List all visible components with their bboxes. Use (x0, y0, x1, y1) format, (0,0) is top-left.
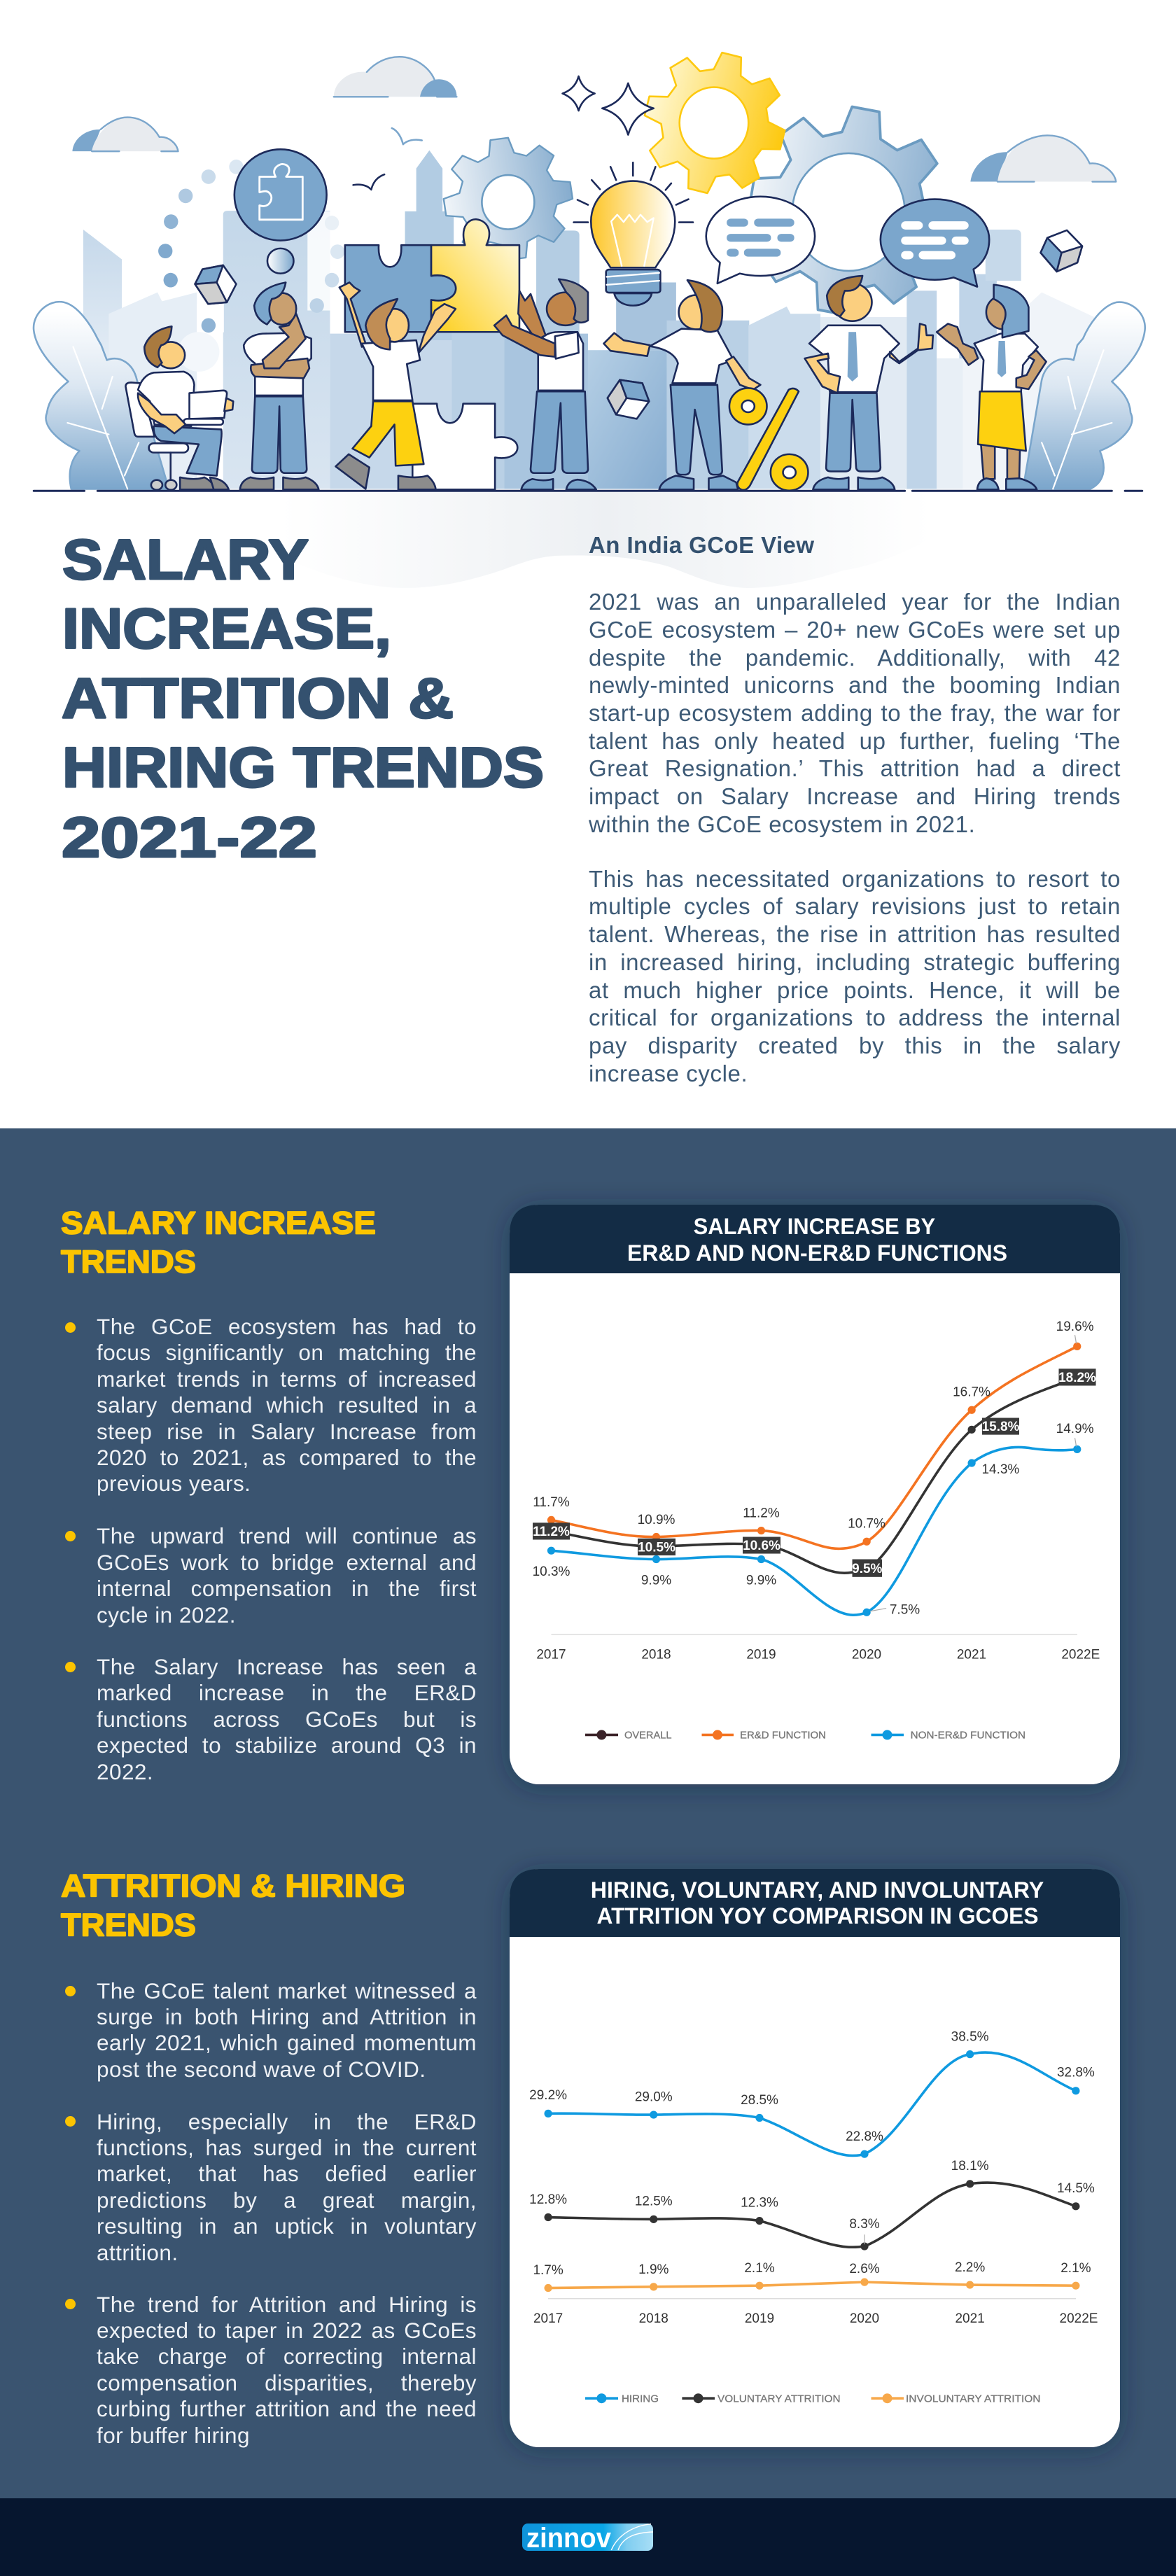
intro paragraph 1: newly-minted unicorns and the booming Indian (589, 672, 1121, 698)
attrition bullet 3: for buffer hiring (97, 2423, 250, 2448)
person: man holding puzzle (494, 279, 596, 489)
salary bullet 3: The Salary Increase has seen a (97, 1654, 477, 1679)
salary bullet 2: GCoEs work to bridge external and (97, 1550, 477, 1575)
intro paragraph 1: start-up ecosystem adding to the fray, the war for (589, 700, 1121, 726)
value labels: ER&D: 11.7% (533, 1495, 570, 1510)
attrition bullet 3: The trend for Attrition and Hiring is (97, 2292, 477, 2317)
value labels: overall: 15.8% (982, 1420, 1020, 1434)
x axis years: 2020 (850, 2311, 879, 2326)
light bulb (574, 162, 693, 306)
speech bubble: white (706, 197, 815, 284)
value labels: overall: 9.5% (852, 1562, 883, 1576)
heading: salary increase trends: SALARY INCREASE (61, 1205, 376, 1240)
salary bullet 3: 2022. (97, 1759, 153, 1784)
person: woman raising puzzle (335, 282, 456, 489)
value labels: non-ER&D (533, 1422, 1094, 1617)
chart title (627, 1214, 1007, 1266)
plant: left (34, 302, 169, 489)
salary bullet 1: market trends in terms of increased (97, 1366, 477, 1392)
attrition bullet 1: surge in both Hiring and Attrition in (97, 2004, 477, 2029)
value labels: voluntary attrition (529, 2159, 1095, 2232)
attrition bullet 2: resulting in an uptick in voluntary (97, 2213, 477, 2239)
cube: lower (608, 380, 649, 419)
value labels: hiring: 22.8% (846, 2129, 883, 2144)
birds (354, 128, 422, 190)
x axis years: 2017 (536, 1648, 566, 1662)
attrition bullet 1: The GCoE talent market witnessed a (97, 1978, 477, 2003)
illustration: team solving a puzzle (34, 38, 1145, 491)
city skyline (83, 150, 1094, 489)
gear: small blue (436, 130, 580, 267)
salary bullet 1: salary demand which resulted in a (97, 1392, 477, 1418)
salary bullet 1: previous years. (97, 1471, 251, 1496)
value labels: ER&D: 11.2% (743, 1506, 780, 1520)
attrition bullet 3: expected to taper in 2022 as GCoEs (97, 2318, 477, 2343)
line series: overall, ER&D, non-ER&D (547, 1336, 1081, 1616)
bullet marker (64, 1531, 76, 1541)
attrition bullet 3: curbing further attrition and the need (97, 2396, 477, 2421)
attrition bullet 2: functions, has surged in the current (97, 2135, 477, 2160)
gear: yellow (630, 38, 799, 208)
attrition bullet 3: take charge of correcting internal (97, 2344, 477, 2369)
salary bullet 1: 2020 to 2021, as compared to the (97, 1445, 477, 1470)
value labels: overall: 11.2% (533, 1525, 570, 1539)
value labels: involuntary attrition: 2.1% (1060, 2261, 1091, 2276)
value labels: hiring: 38.5% (951, 2030, 989, 2044)
attrition bullet 3 (97, 2292, 477, 2448)
salary bullet 1: focus significantly on matching the (97, 1340, 477, 1365)
cube: right (1041, 230, 1082, 272)
panel: hiring and attrition chart (510, 1869, 1120, 2447)
title: SALARY (62, 528, 309, 592)
intro paragraph 1: within the GCoE ecosystem in 2021. (589, 811, 975, 837)
value labels: hiring: 29.2% (529, 2088, 567, 2103)
legend: INVOLUNTARY ATTRITION (906, 2393, 1040, 2404)
speech bubble: blue (881, 200, 989, 287)
value labels: hiring (529, 2030, 1095, 2144)
cube: left (195, 265, 236, 304)
salary bullet 1 (97, 1314, 477, 1496)
line series: hiring, voluntary, involuntary (545, 2050, 1079, 2292)
legend: VOLUNTARY ATTRITION (718, 2393, 841, 2404)
person: man with thumbs up (805, 276, 933, 489)
attrition bullet 2 (97, 2108, 477, 2265)
intro paragraph 2: at much higher price points. Hence, it will be (589, 977, 1121, 1002)
value labels: overall: 18.2% (1058, 1371, 1096, 1385)
heading: salary increase trends (61, 1205, 376, 1280)
value labels: hiring: 32.8% (1057, 2066, 1095, 2080)
x axis years (533, 2311, 1098, 2326)
chart title: ER&D AND NON-ER&D FUNCTIONS (627, 1240, 1007, 1266)
heading: attrition and hiring trends: ATTRITION & HIRING (61, 1868, 405, 1904)
gear: large blue (734, 92, 962, 330)
footer bar (0, 2498, 1176, 2576)
value labels: ER&D: 19.6% (1056, 1320, 1094, 1334)
title (62, 528, 544, 869)
attrition bullet 1: early 2021, which gained momentum (97, 2030, 477, 2055)
value labels: voluntary attrition: 18.1% (951, 2159, 989, 2174)
value labels: voluntary attrition: 12.5% (635, 2194, 673, 2209)
intro paragraph 1: GCoE ecosystem – 20+ new GCoEs were set up (589, 617, 1121, 643)
attrition bullet 3: compensation disparities, thereby (97, 2370, 477, 2395)
logo: zinnov (522, 2523, 653, 2554)
salary bullet 2 (97, 1523, 477, 1628)
intro paragraph 1: Great Resignation.’ This attrition had a direct (589, 755, 1121, 781)
intro paragraph 2: in increased hiring, including strategic buffering (589, 949, 1121, 975)
intro paragraph 1 (589, 589, 1121, 837)
person: woman presenting (603, 280, 760, 489)
card background (510, 1205, 1120, 1784)
value labels: non-ER&D: 9.9% (641, 1573, 671, 1588)
intro paragraph 2: pay disparity created by this in the salary (589, 1032, 1121, 1058)
value labels: overall: 10.5% (638, 1540, 676, 1555)
attrition bullet 2: attrition. (97, 2240, 178, 2265)
puzzle pieces held up (345, 219, 519, 332)
card header (510, 1205, 1120, 1273)
value labels: involuntary attrition: 1.7% (533, 2263, 564, 2278)
title: HIRING TRENDS (62, 736, 544, 799)
chart title: SALARY INCREASE BY (694, 1214, 935, 1239)
legend: HIRING (622, 2393, 659, 2404)
x axis years: 2020 (852, 1648, 881, 1662)
intro paragraph 2: increase cycle. (589, 1060, 748, 1086)
value labels: non-ER&D: 9.9% (746, 1573, 776, 1588)
percent symbol (729, 388, 808, 491)
x axis years: 2022E (1060, 2311, 1098, 2326)
axis line (548, 2298, 1076, 2300)
legend: OVERALL (624, 1729, 672, 1741)
intro paragraph 1: talent has only heated up further, fueling ‘The (589, 728, 1121, 754)
cloud: left (72, 118, 178, 151)
value labels: involuntary attrition: 2.1% (744, 2261, 775, 2276)
title: 2021-22 (62, 806, 317, 869)
salary bullet 2: The upward trend will continue as (97, 1523, 477, 1548)
salary bullet 3: marked increase in the ER&D (97, 1680, 477, 1705)
value labels: voluntary attrition: 12.3% (741, 2195, 778, 2210)
person: seated with laptop (125, 326, 233, 490)
value labels: voluntary attrition: 12.8% (529, 2192, 567, 2207)
person: woman in yellow skirt (937, 285, 1046, 489)
cloud: top centre (334, 57, 456, 97)
value labels: involuntary attrition: 2.6% (849, 2262, 880, 2276)
attrition bullet 1: post the second wave of COVID. (97, 2057, 426, 2082)
logo: zinnov: zinnov (526, 2523, 612, 2554)
intro paragraph 1: 2021 was an unparalleled year for the Indian (589, 589, 1121, 615)
bullet marker (64, 1985, 76, 1996)
value labels: involuntary attrition: 1.9% (638, 2262, 669, 2277)
value labels: voluntary attrition: 8.3% (849, 2217, 880, 2232)
x axis years: 2019 (745, 2311, 774, 2326)
legend: ER&D FUNCTION (740, 1729, 826, 1741)
heading: salary increase trends: TRENDS (61, 1244, 196, 1280)
chart title: HIRING, VOLUNTARY, AND INVOLUNTARY (591, 1877, 1044, 1903)
white puzzle piece (412, 404, 517, 489)
plant: right (1023, 302, 1145, 489)
salary bullet 3: functions across GCoEs but is (97, 1707, 477, 1732)
heading: attrition and hiring trends (61, 1868, 405, 1943)
salary bullet 1: steep rise in Salary Increase from (97, 1419, 477, 1444)
value labels: non-ER&D: 10.3% (533, 1564, 570, 1579)
title: ATTRITION & (62, 667, 454, 730)
attrition bullet 2: predictions by a great margin, (97, 2188, 477, 2213)
card header (510, 1869, 1120, 1937)
value labels: overall: 10.6% (743, 1539, 780, 1553)
legend: NON-ER&D FUNCTION (911, 1729, 1026, 1741)
value labels: involuntary attrition: 2.2% (955, 2260, 985, 2275)
dark trends section background (0, 1128, 1176, 2498)
x axis years: 2019 (746, 1648, 776, 1662)
thought bubble with puzzle icon (234, 149, 327, 274)
x axis years: 2017 (533, 2311, 563, 2326)
value labels: ER&D: 16.7% (953, 1385, 990, 1400)
value labels: ER&D: 10.7% (848, 1517, 886, 1532)
background wave (280, 492, 931, 588)
value labels: non-ER&D: 14.9% (1056, 1422, 1094, 1436)
value labels: voluntary attrition: 14.5% (1057, 2181, 1095, 2196)
title: INCREASE, (62, 598, 391, 661)
x axis years: 2022E (1061, 1648, 1100, 1662)
intro paragraph 2: talent. Whereas, the rise in attrition has resulted (589, 921, 1121, 947)
bullet marker (64, 1322, 76, 1333)
intro paragraph 1: despite the pandemic. Additionally, with 42 (589, 645, 1121, 671)
x axis years: 2018 (639, 2311, 668, 2326)
x axis years (536, 1648, 1100, 1662)
person: thinking (240, 282, 318, 489)
attrition bullet 2: Hiring, especially in the ER&D (97, 2108, 477, 2134)
stars (563, 76, 654, 135)
legend (585, 2393, 1040, 2404)
intro paragraph 1: impact on Salary Increase and Hiring trends (589, 783, 1121, 809)
axis line (552, 1634, 1077, 1635)
attrition bullet 2: market, that has defied earlier (97, 2161, 477, 2186)
intro heading: An India GCoE View (589, 532, 814, 558)
salary bullet 2: cycle in 2022. (97, 1602, 236, 1628)
ground line (34, 490, 1142, 492)
intro paragraph 2: critical for organizations to address the internal (589, 1004, 1121, 1030)
value labels: hiring: 28.5% (741, 2093, 778, 2108)
dotted arc (158, 160, 344, 332)
x axis years: 2021 (957, 1648, 986, 1662)
salary bullet 3: expected to stabilize around Q3 in (97, 1732, 477, 1758)
panel: salary increase chart (510, 1205, 1120, 1784)
x axis years: 2018 (641, 1648, 671, 1662)
value labels: non-ER&D: 14.3% (981, 1462, 1019, 1477)
legend (585, 1729, 1026, 1741)
attrition bullet 1 (97, 1978, 477, 2082)
chart title: ATTRITION YOY COMPARISON IN GCOES (596, 1903, 1039, 1928)
value labels: involuntary attrition (533, 2260, 1091, 2278)
value labels: hiring: 29.0% (635, 2090, 673, 2104)
value labels: ER&D (533, 1320, 1094, 1532)
bullet marker (64, 1662, 76, 1672)
bullet marker (64, 2299, 76, 2309)
value labels: overall (533, 1368, 1096, 1577)
cloud: right (970, 135, 1116, 182)
value labels: non-ER&D: 7.5% (890, 1603, 920, 1617)
salary bullet 3 (97, 1654, 477, 1784)
chart title (591, 1877, 1044, 1928)
salary bullet 1: The GCoE ecosystem has had to (97, 1314, 477, 1339)
salary bullet 2: internal compensation in the first (97, 1576, 477, 1601)
heading: attrition and hiring trends: TRENDS (61, 1907, 196, 1943)
intro paragraph 2: multiple cycles of salary revisions just to retain (589, 893, 1121, 919)
card background (510, 1869, 1120, 2447)
intro paragraph 2 (589, 866, 1121, 1086)
x axis years: 2021 (955, 2311, 985, 2326)
intro paragraph 2: This has necessitated organizations to resort to (589, 866, 1121, 892)
value labels: ER&D: 10.9% (638, 1513, 676, 1527)
bullet marker (64, 2115, 76, 2127)
